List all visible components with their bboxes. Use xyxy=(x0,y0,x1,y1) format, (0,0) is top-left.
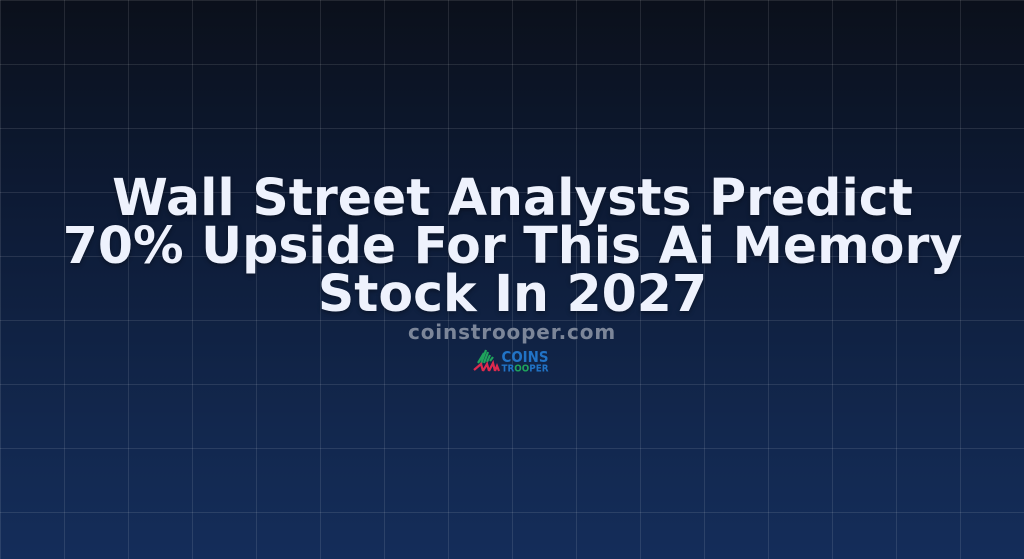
title: Wall Street Analysts Predict xyxy=(112,168,913,227)
logo wordmark xyxy=(502,348,549,374)
title: Stock In 2027 xyxy=(318,264,707,323)
title: 70% Upside For This Ai Memory xyxy=(63,216,962,275)
logo: CoinsTrooper xyxy=(473,348,549,374)
icon: green and red chart peaks xyxy=(474,350,499,371)
website name: coinstrooper.com xyxy=(408,320,616,344)
title xyxy=(63,168,962,323)
